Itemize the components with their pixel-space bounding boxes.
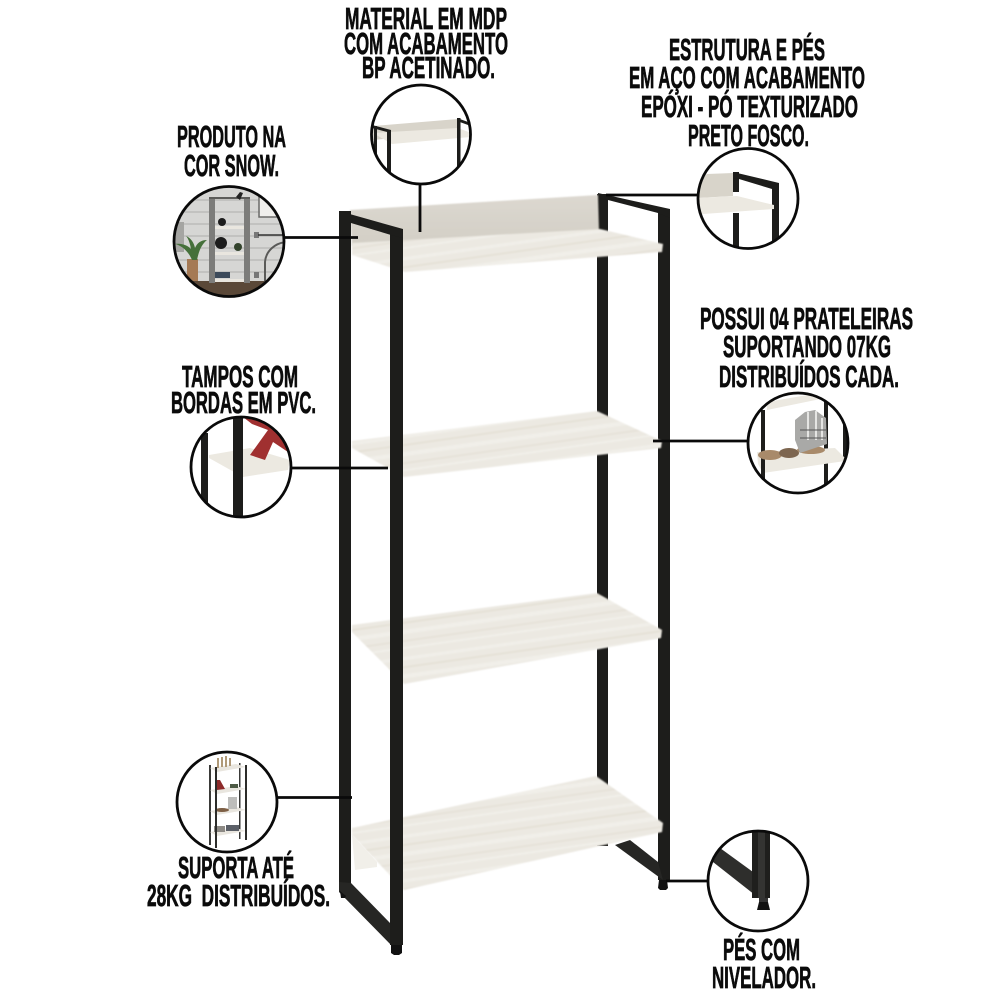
heading: PVC edges bbox=[171, 360, 316, 420]
heading: structure: PRETO FOSCO. bbox=[688, 119, 809, 153]
circle outline bbox=[698, 148, 798, 248]
front left foot bbox=[391, 945, 402, 955]
heading: levelling feet bbox=[712, 932, 816, 995]
leader line bbox=[666, 880, 708, 882]
callout: PVC edges bbox=[171, 360, 388, 518]
icon: foot detail bbox=[713, 829, 770, 910]
circle outline bbox=[191, 417, 291, 517]
heading: four shelves bbox=[700, 302, 913, 394]
heading: material bbox=[344, 2, 508, 85]
heading: colour bbox=[177, 120, 286, 183]
callout: material bbox=[344, 2, 508, 232]
heading: material: MATERIAL EM MDP bbox=[345, 2, 507, 36]
left top frame bar bbox=[339, 211, 403, 238]
leader line bbox=[291, 467, 388, 469]
rear left foot bbox=[340, 891, 346, 898]
leader line bbox=[277, 796, 352, 799]
icon: frame corner detail bbox=[697, 172, 779, 251]
heading: PVC edges: TAMPOS COM bbox=[182, 360, 298, 394]
circle outline bbox=[708, 831, 808, 931]
leader line bbox=[284, 236, 358, 239]
right foot bbox=[658, 880, 668, 890]
heading: levelling feet: PÉS COM bbox=[723, 932, 800, 967]
heading: colour: PRODUTO NA bbox=[177, 120, 286, 154]
leader line bbox=[419, 184, 421, 232]
heading: total load: 28KG DISTRIBUÍDOS. bbox=[147, 878, 330, 913]
circle outline bbox=[174, 186, 284, 296]
heading: structure bbox=[629, 32, 865, 153]
leader line bbox=[653, 440, 748, 442]
right foot frame diagonal bbox=[615, 840, 663, 880]
heading: levelling feet: NIVELADOR. bbox=[712, 961, 816, 995]
circle outline bbox=[748, 393, 848, 493]
icon: decorated shelf detail bbox=[757, 392, 847, 487]
heading: material: BP ACETINADO. bbox=[362, 51, 495, 85]
shelf 1 bbox=[352, 229, 663, 272]
left foot frame diagonal bbox=[339, 882, 393, 947]
lower rear panel bbox=[352, 835, 377, 870]
shelf 4 bbox=[352, 776, 663, 890]
rear left post bbox=[339, 211, 351, 883]
circle outline bbox=[372, 85, 470, 184]
heading: total load: SUPORTA ATÉ bbox=[178, 850, 294, 885]
callout: levelling feet bbox=[666, 829, 816, 995]
heading: structure: ESTRUTURA E PÉS bbox=[669, 32, 825, 67]
heading: material: COM ACABAMENTO bbox=[344, 27, 508, 61]
heading: total load bbox=[147, 850, 330, 913]
shelf 3 bbox=[352, 593, 662, 684]
front right post bbox=[658, 209, 670, 880]
heading: PVC edges: BORDAS EM PVC. bbox=[171, 386, 316, 420]
front left post bbox=[390, 229, 403, 945]
icon: room photo bbox=[175, 188, 283, 296]
back panel bbox=[350, 195, 599, 246]
icon: styled shelf thumbnail bbox=[209, 756, 247, 848]
icon: shelf edge detail bbox=[201, 416, 290, 518]
heading: colour: COR SNOW. bbox=[184, 149, 279, 183]
leader line bbox=[606, 194, 698, 196]
callout: structure bbox=[606, 32, 865, 251]
rear right post bbox=[597, 194, 608, 846]
icon: top shelf detail bbox=[373, 118, 469, 172]
product: metal shelving unit bbox=[339, 193, 670, 955]
callout: colour bbox=[170, 120, 358, 301]
shelf 2 bbox=[352, 411, 662, 477]
circle outline bbox=[177, 752, 277, 852]
right top frame bar bbox=[598, 193, 670, 218]
callout: four shelves bbox=[653, 302, 913, 493]
callout: total load bbox=[147, 752, 352, 913]
